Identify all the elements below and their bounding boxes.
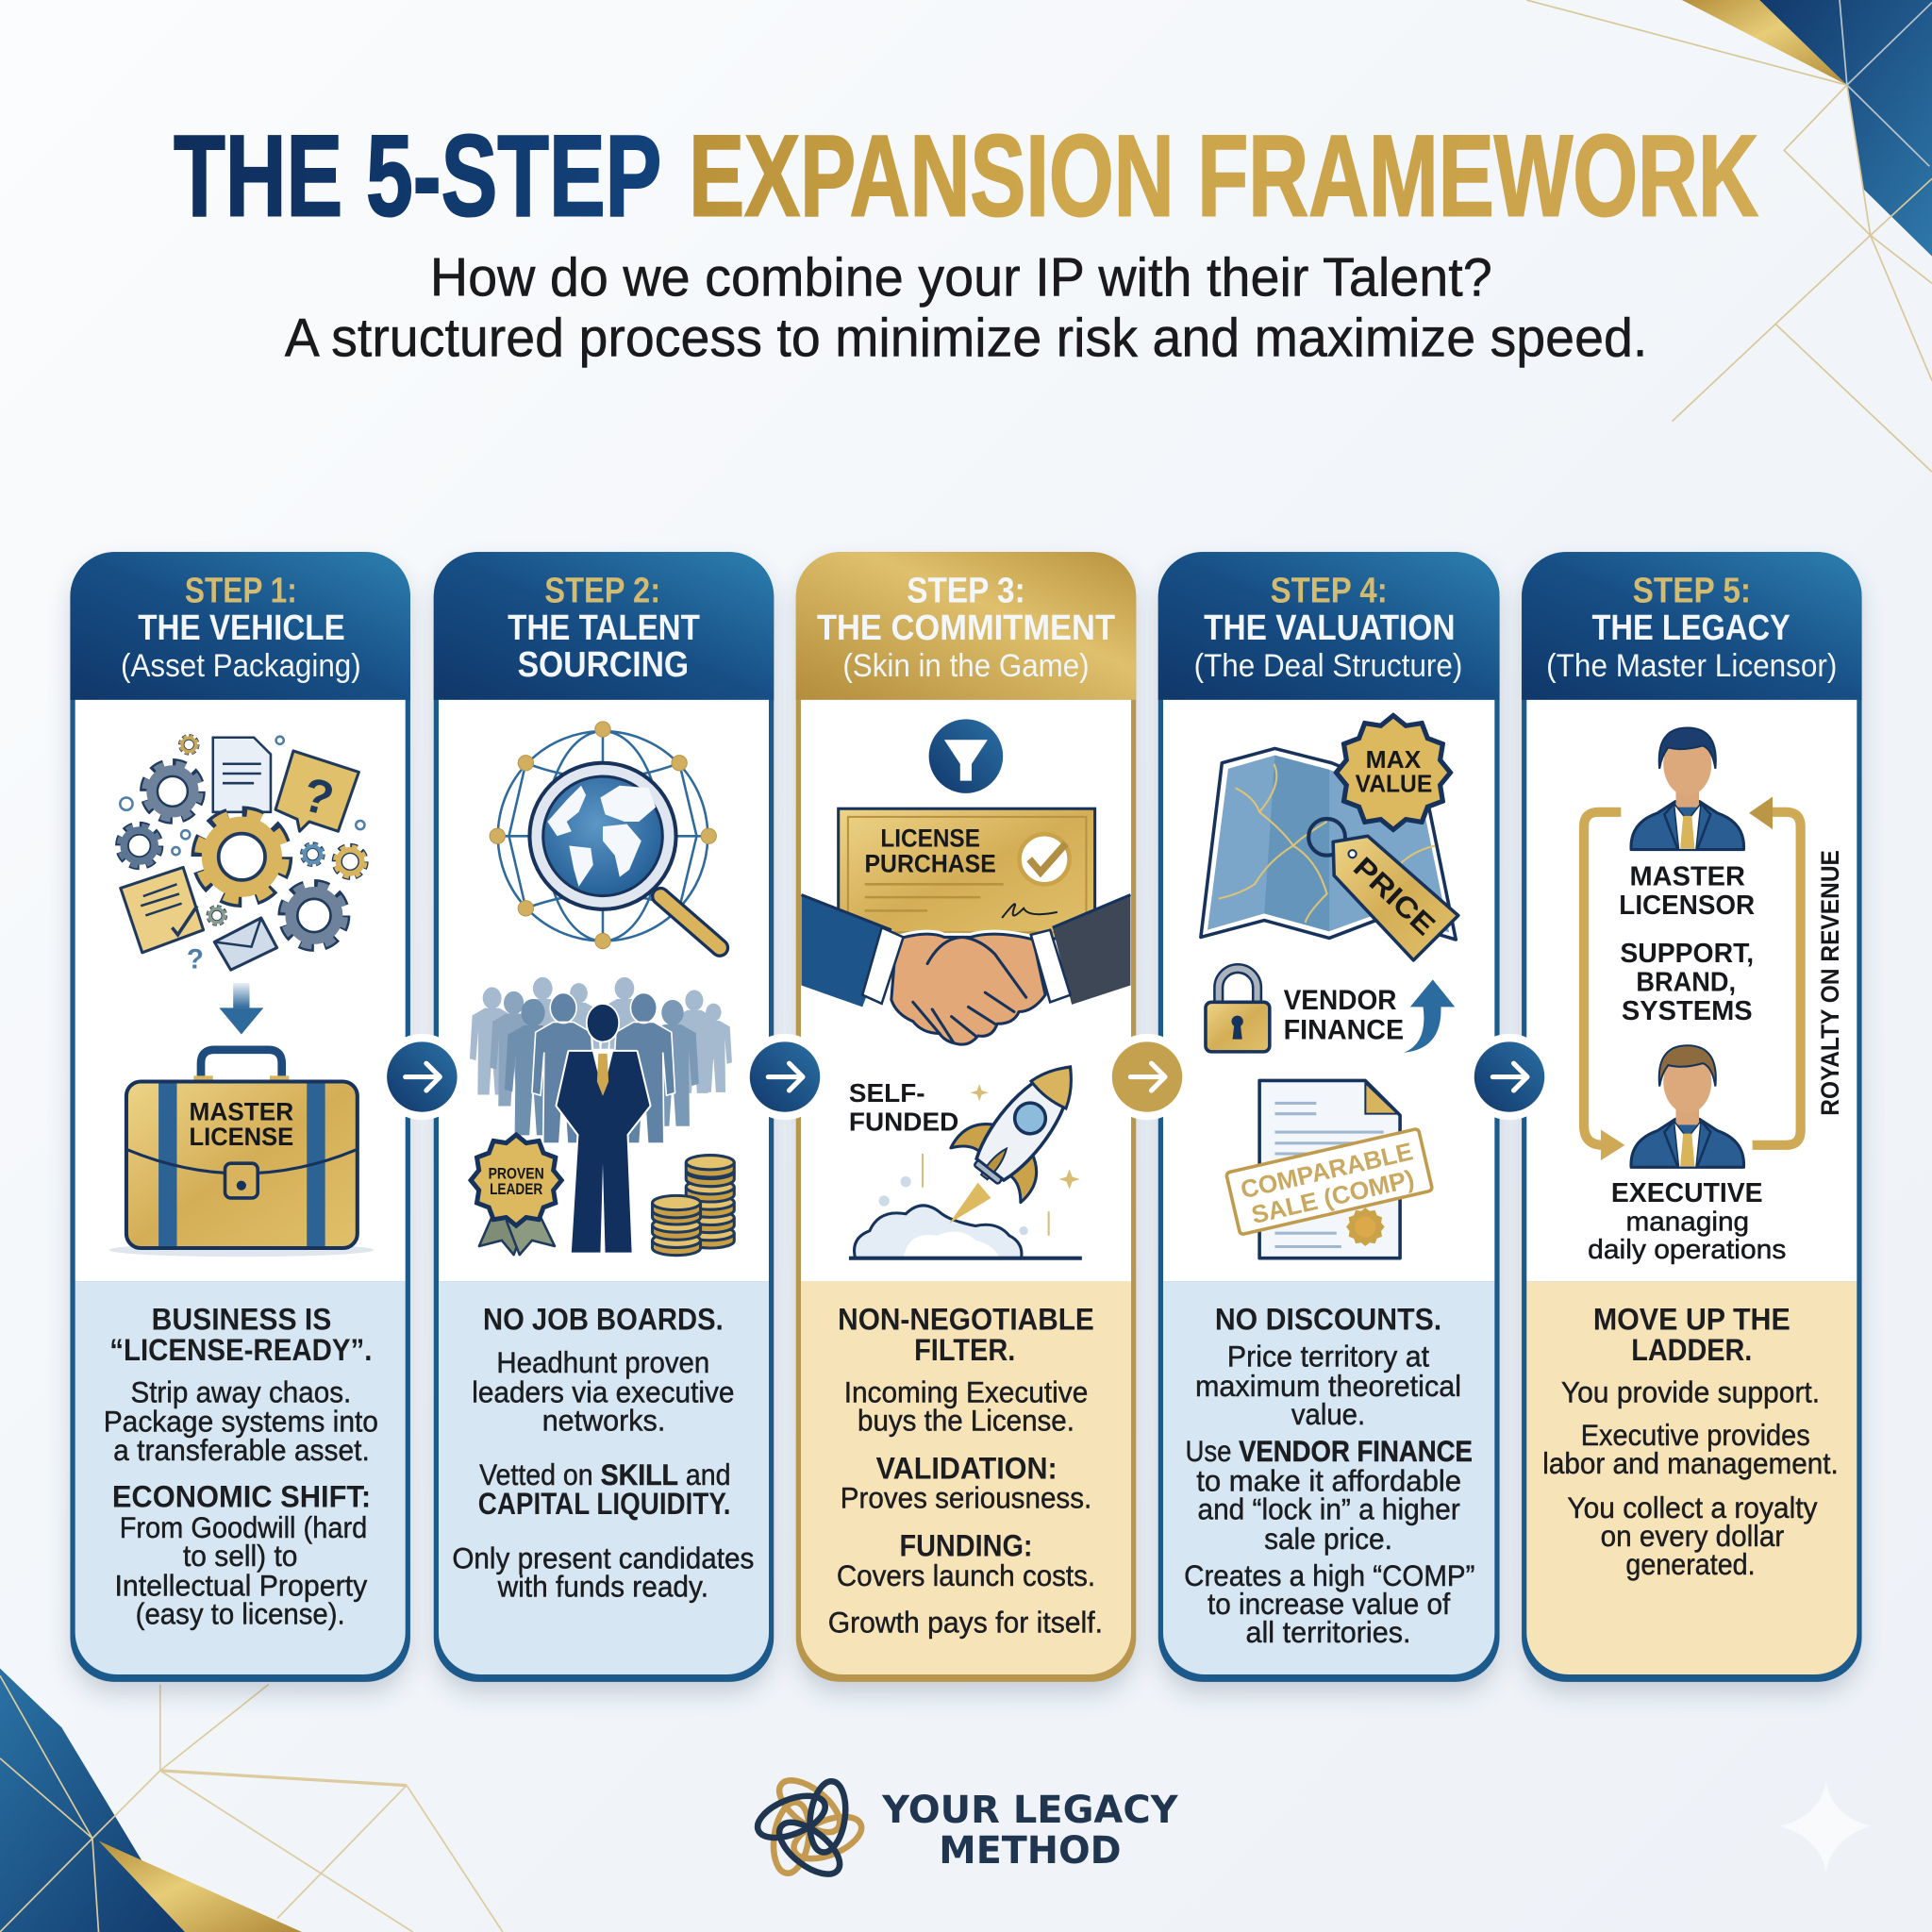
header text: (Skin in the Game) — [842, 648, 1090, 684]
arrow: step 1 to step 2 — [379, 1034, 465, 1120]
description text: “LICENSE-READY”. — [109, 1332, 372, 1367]
illustration: map, price tag, vendor finance, comp document: PRICE — [1347, 851, 1441, 941]
description text: buys the License. — [858, 1404, 1074, 1437]
description text: Headhunt proven — [496, 1346, 709, 1379]
illustration: map, price tag, vendor finance, comp document — [1201, 714, 1458, 1258]
description text: Proves seriousness. — [841, 1482, 1091, 1515]
illustration: licensor and executive royalty loop: SYSTEMS — [1622, 996, 1753, 1026]
illustration: map, price tag, vendor finance, comp document: SALE (COMP) — [1249, 1164, 1417, 1229]
header text: THE TALENT — [508, 608, 700, 648]
description text: to make it affordable — [1196, 1464, 1461, 1497]
description text: and “lock in” a higher — [1198, 1492, 1460, 1525]
subtitle: A structured process to minimize risk and maximize speed. — [285, 308, 1647, 368]
description text: sale price. — [1264, 1523, 1392, 1556]
illustration: scattered gears and documents: LICENSE — [190, 1123, 293, 1151]
description text: to increase value of — [1208, 1588, 1451, 1621]
header text: STEP 5: — [1633, 572, 1751, 611]
illustration: licensor and executive royalty loop: MASTER — [1630, 861, 1745, 891]
illustration: licensor and executive royalty loop: SUPPORT, — [1620, 939, 1754, 969]
header text: (The Master Licensor) — [1546, 648, 1837, 684]
header text — [817, 572, 1115, 684]
description text: to sell) to — [183, 1540, 297, 1573]
header text — [1546, 572, 1837, 684]
logo wordmark — [881, 1787, 1178, 1873]
description text: Growth pays for itself. — [828, 1607, 1103, 1640]
header text — [121, 572, 361, 684]
illustration: licensor and executive royalty loop: LICENSOR — [1619, 891, 1756, 921]
description text: value. — [1291, 1398, 1365, 1431]
description text: labor and management. — [1542, 1447, 1839, 1480]
header text — [508, 572, 700, 685]
subtitle: How do we combine your IP with their Talent? — [430, 247, 1492, 308]
title: THE 5-STEP — [174, 112, 661, 242]
header text: THE LEGACY — [1592, 608, 1790, 648]
panel: step 5 the legacy — [1522, 552, 1862, 1682]
description text: Executive provides — [1581, 1419, 1810, 1452]
description text: Package systems into — [104, 1406, 378, 1439]
description text: all territories. — [1245, 1616, 1411, 1649]
description text: CAPITAL LIQUIDITY. — [478, 1486, 731, 1521]
description text: BUSINESS IS — [152, 1301, 331, 1336]
description text: LADDER. — [1631, 1332, 1752, 1367]
description text: Only present candidates — [452, 1542, 754, 1575]
description text: You collect a royalty — [1567, 1491, 1818, 1524]
illustration: filter, license, handshake, rocket: SELF- — [849, 1078, 925, 1108]
description text: networks. — [542, 1404, 665, 1437]
logo wordmark: YOUR LEGACY — [881, 1787, 1178, 1832]
illustration: global search and leader: LEADER — [490, 1180, 542, 1198]
illustration: filter, license, handshake, rocket: LICENSE — [880, 824, 980, 853]
decoration: top-right corner — [1526, 0, 1932, 472]
header text: THE COMMITMENT — [817, 608, 1115, 648]
arrow: step 2 to step 3 — [741, 1034, 828, 1120]
panel: step 2 the talent sourcing — [434, 552, 774, 1682]
description text: ECONOMIC SHIFT: — [112, 1478, 371, 1513]
description text — [1184, 1301, 1474, 1649]
description text: Strip away chaos. — [130, 1375, 351, 1408]
illustration: map, price tag, vendor finance, comp document: FINANCE — [1284, 1015, 1404, 1046]
description text: NO JOB BOARDS. — [483, 1301, 724, 1336]
decoration: bottom-left corner — [0, 1668, 503, 1932]
illustration: map, price tag, vendor finance, comp document: VENDOR — [1284, 985, 1397, 1016]
illustration: map, price tag, vendor finance, comp document: MAX — [1366, 747, 1421, 774]
description text: maximum theoretical — [1195, 1370, 1461, 1403]
panel: step 1 the vehicle — [70, 552, 410, 1682]
title — [174, 112, 1758, 242]
description text: Creates a high “COMP” — [1184, 1559, 1474, 1592]
illustration: licensor and executive royalty loop: EXECUTIVE — [1611, 1178, 1763, 1208]
description text: MOVE UP THE — [1593, 1301, 1790, 1336]
description text: NON-NEGOTIABLE — [838, 1301, 1094, 1336]
description text: From Goodwill (hard — [120, 1511, 367, 1544]
panel: step 3 the commitment — [796, 552, 1136, 1682]
description text: Price territory at — [1227, 1340, 1429, 1373]
description text: on every dollar — [1601, 1520, 1784, 1553]
illustration: licensor and executive royalty loop: BRAND, — [1636, 968, 1736, 998]
description text: FILTER. — [914, 1332, 1015, 1367]
description text: with funds ready. — [497, 1571, 708, 1604]
subtitle — [285, 247, 1647, 368]
description text — [828, 1301, 1103, 1640]
header text: STEP 1: — [185, 572, 297, 611]
illustration: map, price tag, vendor finance, comp document: VALUE — [1356, 771, 1432, 797]
description text: FUNDING: — [899, 1528, 1033, 1563]
description text: leaders via executive — [472, 1375, 734, 1408]
illustration: scattered gears and documents: ? — [297, 767, 340, 826]
illustration: filter, license, handshake, rocket: PURCHASE — [865, 850, 996, 878]
arrow: step 3 to step 4 — [1104, 1034, 1191, 1120]
header text: (The Deal Structure) — [1194, 648, 1462, 684]
logo wordmark: METHOD — [939, 1827, 1122, 1873]
header text: STEP 2: — [544, 572, 660, 611]
description text — [452, 1301, 754, 1604]
illustration: global search and leader — [469, 722, 734, 1256]
description text: Intellectual Property — [114, 1569, 368, 1602]
description text: (easy to license). — [136, 1597, 345, 1630]
description text — [104, 1301, 378, 1630]
description text: Incoming Executive — [844, 1375, 1088, 1408]
description text: VALIDATION: — [876, 1450, 1058, 1485]
arrow: step 4 to step 5 — [1466, 1034, 1553, 1120]
description text: a transferable asset. — [113, 1434, 370, 1467]
illustration: filter, license, handshake, rocket — [801, 719, 1130, 1260]
description text: Use VENDOR FINANCE — [1185, 1435, 1473, 1468]
illustration: scattered gears and documents: ? — [187, 944, 204, 975]
description text: Covers launch costs. — [837, 1559, 1095, 1592]
illustration: scattered gears and documents: MASTER — [190, 1097, 293, 1125]
description text: generated. — [1625, 1548, 1756, 1581]
illustration: map, price tag, vendor finance, comp document: COMPARABLE — [1238, 1137, 1415, 1204]
header text: (Asset Packaging) — [121, 648, 361, 684]
description text — [1542, 1301, 1839, 1581]
logo: your legacy method — [752, 1771, 1178, 1884]
header text: SOURCING — [518, 645, 689, 685]
header text: STEP 4: — [1271, 572, 1388, 611]
illustration: global search and leader: PROVEN — [489, 1165, 544, 1183]
illustration: licensor and executive royalty loop: ROYALTY ON REVENUE — [1816, 850, 1844, 1116]
panel: step 4 the valuation — [1158, 552, 1500, 1682]
icon: sparkle watermark — [1780, 1782, 1871, 1872]
illustration: filter, license, handshake, rocket: FUNDED — [849, 1108, 958, 1137]
header text — [1194, 572, 1462, 684]
description text: You provide support. — [1561, 1375, 1820, 1408]
illustration: licensor and executive royalty loop: managing — [1625, 1208, 1749, 1238]
logo mark: interlaced rings — [752, 1771, 867, 1884]
description text: NO DISCOUNTS. — [1215, 1301, 1441, 1336]
header text: THE VALUATION — [1204, 608, 1456, 648]
illustration: licensor and executive royalty loop: daily operations — [1588, 1235, 1786, 1265]
illustration: scattered gears and documents — [109, 736, 374, 1257]
header text: STEP 3: — [907, 572, 1025, 611]
illustration: licensor and executive royalty loop — [1584, 728, 1844, 1265]
description text: Vetted on SKILL and — [479, 1458, 731, 1491]
header text: THE VEHICLE — [138, 608, 345, 648]
